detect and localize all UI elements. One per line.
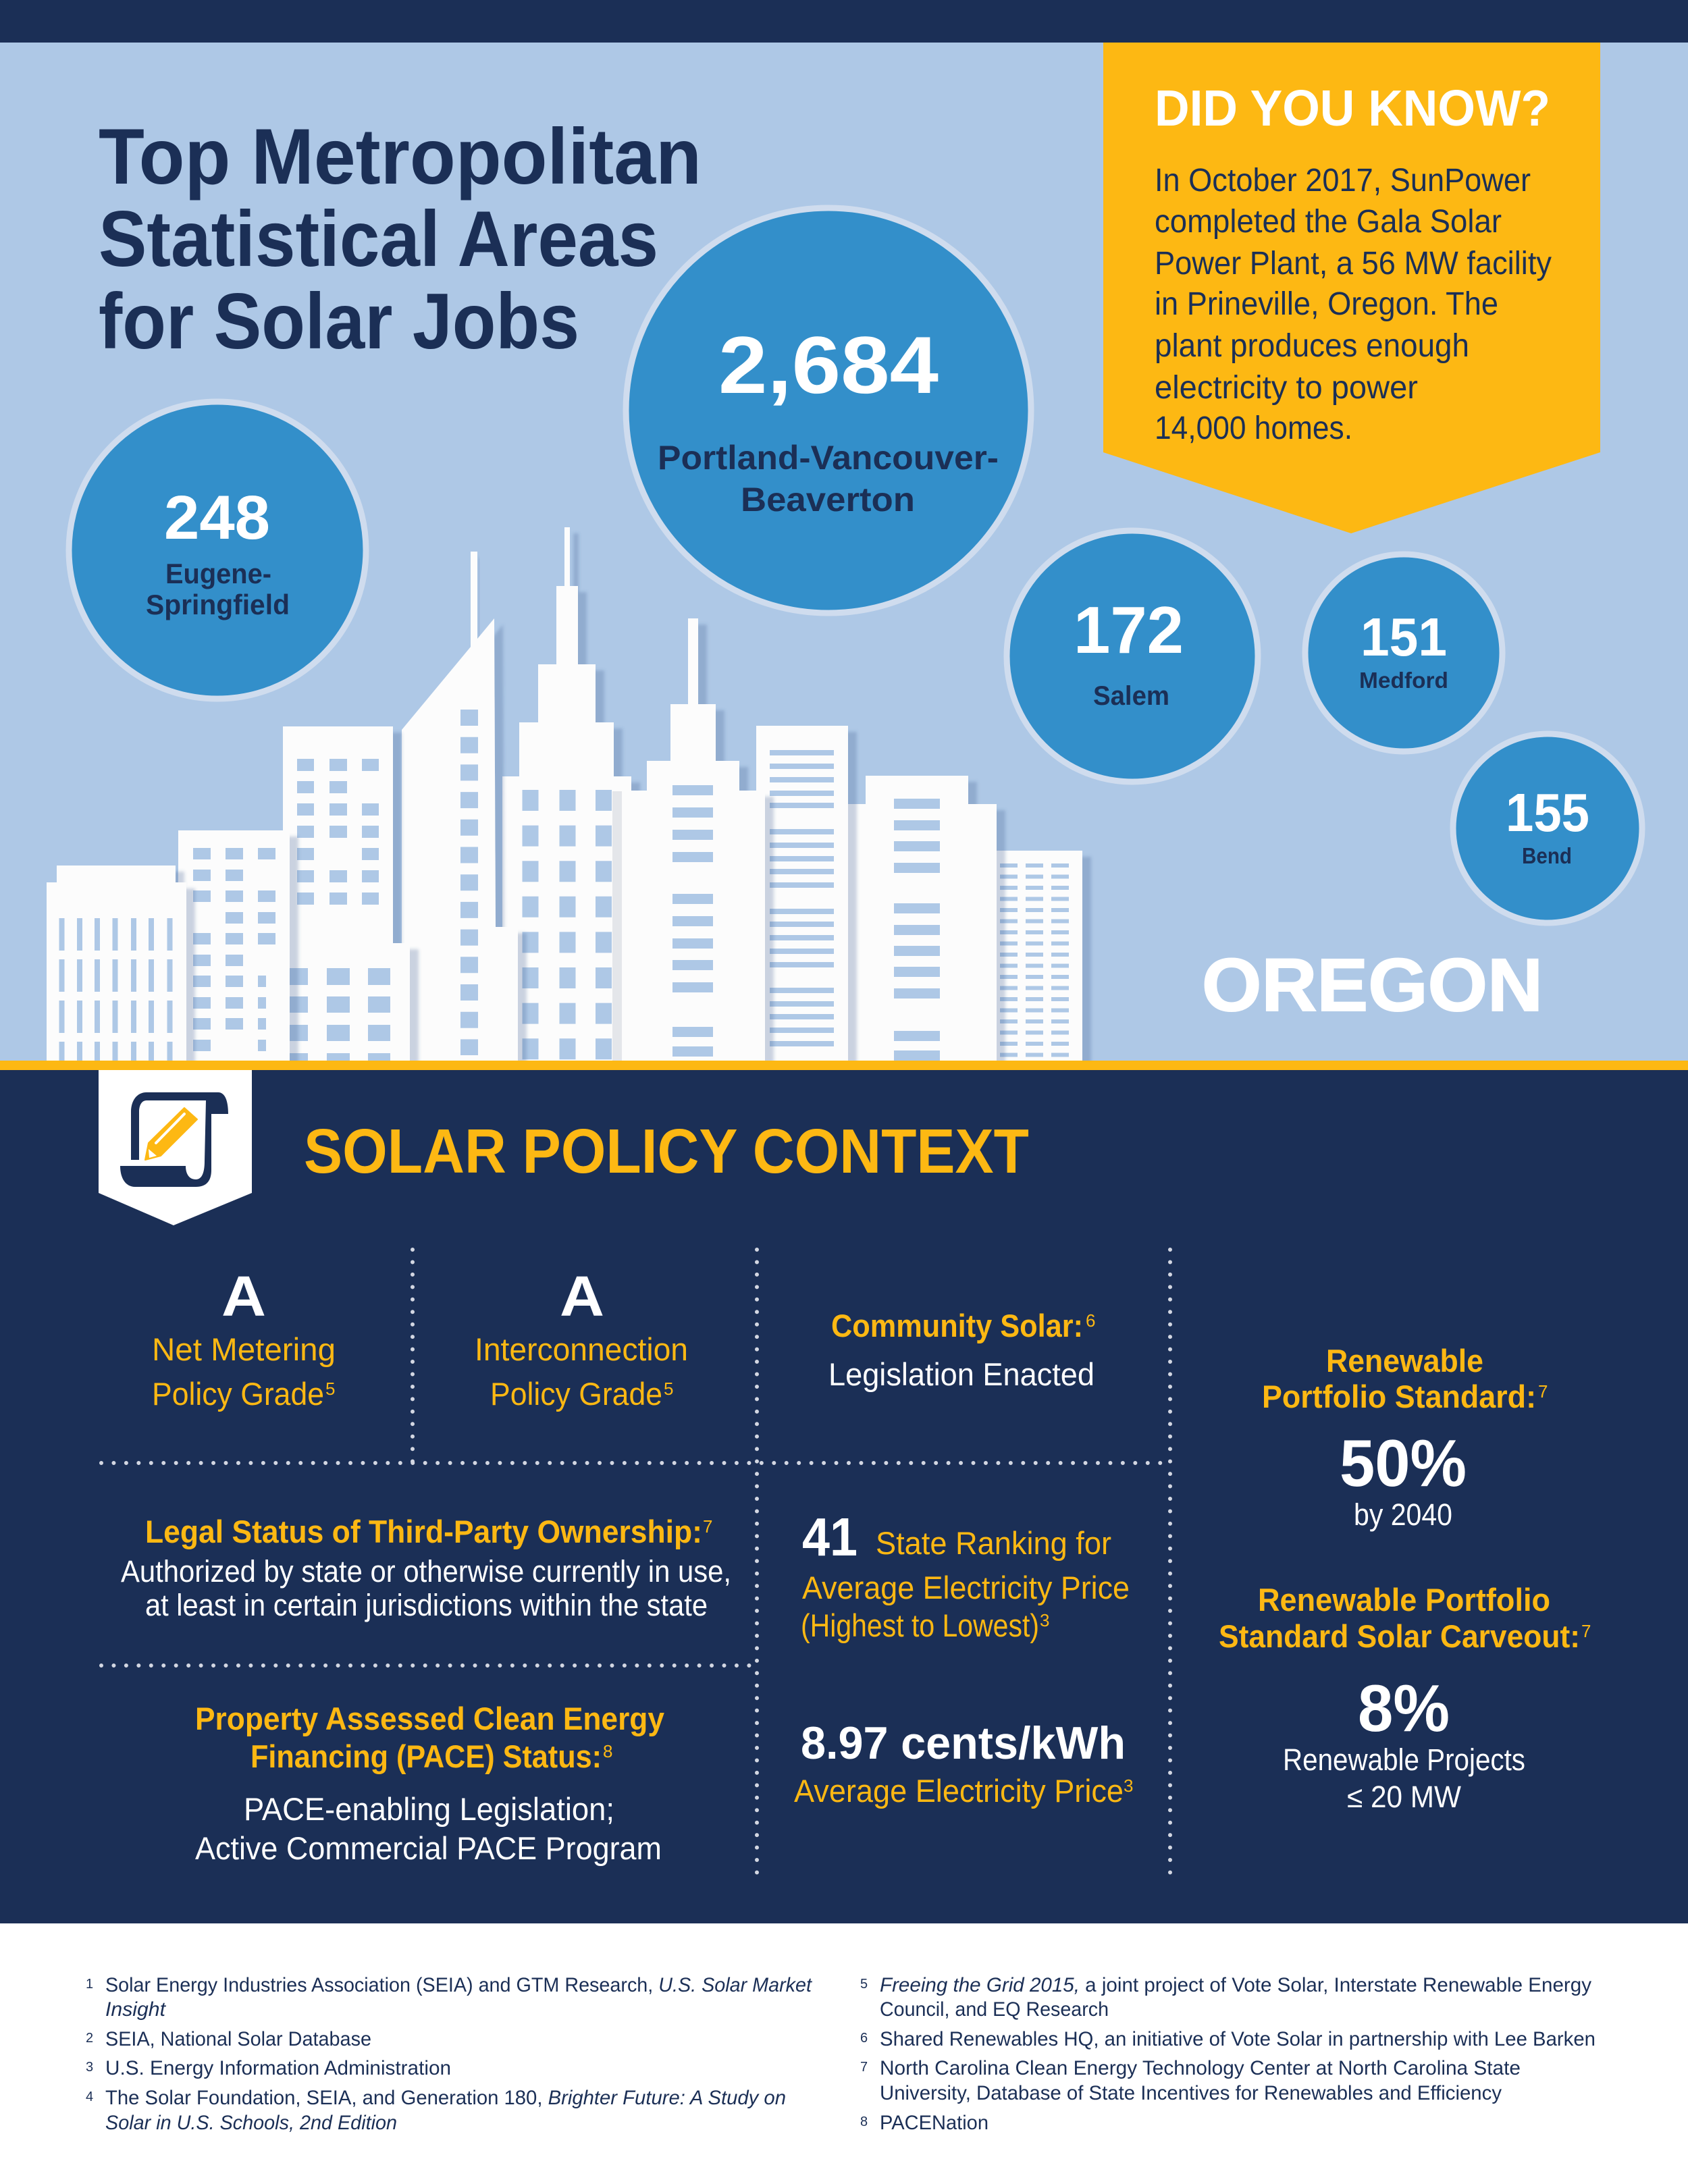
footnotes: left column: 3 — [86, 2060, 93, 2075]
building: central stepped spire tower — [502, 527, 631, 1061]
stat: state ranking: State Ranking for — [876, 1525, 1111, 1561]
stat: interconnection grade: 5 — [664, 1379, 673, 1399]
stat: community solar: Legislation Enacted — [828, 1356, 1094, 1392]
callout body text: Power Plant, a 56 MW facility — [1155, 246, 1552, 282]
bubble: Portland-Vancouver-Beaverton: Portland-Vancouver- — [658, 439, 999, 477]
building: far left block — [47, 865, 186, 1061]
stat: state ranking — [801, 1507, 1130, 1643]
callout: did you know — [1103, 43, 1600, 533]
bubble: Salem: 172 — [1074, 593, 1184, 667]
footnotes: left column: SEIA, National Solar Database — [105, 2028, 371, 2050]
stat: renewable portfolio standard: Portfolio Standard: — [1262, 1379, 1536, 1414]
stat: PACE status: Financing (PACE) Status: — [250, 1738, 602, 1774]
bubble: Medford: Medford — [1359, 668, 1448, 693]
callout body text: In October 2017, SunPower — [1155, 163, 1531, 198]
bubble: Bend: Bend — [1522, 843, 1572, 868]
bubble: Eugene-Springfield: Springfield — [146, 589, 290, 620]
stat: renewable portfolio standard — [1262, 1343, 1548, 1532]
callout body text: 14,000 homes. — [1155, 410, 1352, 446]
stat: interconnection grade: A — [560, 1264, 604, 1328]
stat: interconnection grade — [475, 1264, 688, 1412]
footnotes: right column: 6 — [860, 2031, 868, 2046]
footnotes: left column: Insight — [105, 1998, 167, 2021]
title: for Solar Jobs — [99, 277, 579, 365]
stat: state ranking: Average Electricity Price — [802, 1570, 1130, 1605]
stat: average electricity price: 8.97 cents/kWh — [801, 1717, 1126, 1769]
footnotes: left column: Solar Energy Industries Association (SEIA) and GTM Research, U.S. Solar Market — [105, 1974, 813, 1996]
footnotes: right column: Shared Renewables HQ, an initiative of Vote Solar in partnership with Lee Barken — [880, 2028, 1595, 2050]
footnotes: right column: Council, and EQ Research — [880, 1998, 1109, 2021]
bubble: Eugene-Springfield: 248 — [164, 483, 270, 552]
stat: average electricity price — [794, 1717, 1133, 1809]
building: angled roof tower — [402, 552, 518, 1061]
footnotes: right column: 8 — [860, 2114, 868, 2129]
building: far right low block — [997, 851, 1082, 1061]
stat: state ranking: 3 — [1040, 1610, 1049, 1630]
building: low front block — [287, 943, 410, 1061]
footnotes: left column: 2 — [86, 2031, 93, 2046]
stat: net metering grade: A — [221, 1264, 266, 1328]
footnotes: right column: 7 — [860, 2060, 868, 2075]
stat: community solar — [828, 1308, 1095, 1392]
stat: average electricity price: 3 — [1124, 1776, 1133, 1796]
background: sky panel — [0, 0, 1688, 1061]
stat: interconnection grade: Interconnection — [475, 1331, 688, 1367]
stat: PACE status: 8 — [603, 1741, 612, 1761]
footnotes: right column — [860, 1974, 1595, 2134]
footnotes: left column: 4 — [86, 2089, 93, 2104]
footnotes: left column: U.S. Energy Information Administration — [105, 2057, 451, 2079]
stat: community solar: 6 — [1086, 1310, 1095, 1331]
stat: third-party ownership: Legal Status of Third-Party Ownership: — [145, 1514, 702, 1549]
stat: PACE status — [195, 1701, 664, 1866]
stat: renewable portfolio standard: 7 — [1538, 1381, 1548, 1402]
stat: third-party ownership: Authorized by state or otherwise currently in use, — [121, 1554, 731, 1589]
bubble: Salem — [1007, 531, 1258, 782]
bubble: Bend — [1453, 734, 1642, 923]
state label: Oregon: OREGON — [1202, 944, 1543, 1027]
icon: scroll and pencil badge — [99, 1070, 252, 1225]
panel: solar policy context — [0, 1070, 1688, 1923]
stat: solar carveout: Renewable Portfolio — [1258, 1582, 1550, 1618]
bubble: Eugene-Springfield: Eugene- — [165, 558, 271, 589]
stat: state ranking: 41 — [802, 1507, 858, 1567]
footnotes: right column: Freeing the Grid 2015, a joint project of Vote Solar, Interstate Renewable Energy — [880, 1974, 1591, 1996]
callout body text: electricity to power — [1155, 370, 1418, 406]
stat: solar carveout: ≤ 20 MW — [1347, 1780, 1461, 1814]
stat: net metering grade: 5 — [325, 1379, 335, 1399]
dotted grid dividers — [101, 1250, 1171, 1873]
stat: community solar: Community Solar: — [831, 1308, 1083, 1343]
stat: net metering grade: Policy Grade — [152, 1376, 324, 1412]
title: Top Metropolitan — [99, 112, 702, 201]
stat: solar carveout: 7 — [1581, 1621, 1591, 1641]
callout body text: completed the Gala Solar — [1155, 204, 1502, 240]
bubble: Portland-Vancouver-Beaverton: Beaverton — [741, 481, 915, 518]
stat: net metering grade: Net Metering — [152, 1331, 336, 1367]
bubble: Salem: Salem — [1093, 681, 1169, 711]
callout body text: in Prineville, Oregon. The — [1155, 286, 1498, 322]
callout body text — [1155, 163, 1552, 446]
stat: PACE status: Active Commercial PACE Program — [195, 1830, 662, 1866]
stat: state ranking: (Highest to Lowest) — [801, 1607, 1039, 1643]
stat: third-party ownership — [121, 1514, 731, 1622]
callout body text: plant produces enough — [1155, 328, 1469, 364]
title: Statistical Areas — [99, 194, 658, 283]
city skyline illustration — [47, 527, 1082, 1061]
stat: third-party ownership: at least in certain jurisdictions within the state — [145, 1588, 708, 1622]
gold divider bar — [0, 1061, 1688, 1070]
building: striped tower — [756, 726, 848, 1061]
footnotes: left column: 1 — [86, 1977, 93, 1992]
title — [99, 112, 702, 365]
stat: third-party ownership: 7 — [703, 1516, 712, 1537]
bubble: Eugene-Springfield — [69, 402, 366, 699]
footnotes: left column: The Solar Foundation, SEIA, and Generation 180, Brighter Future: A Study on — [105, 2087, 786, 2109]
building: mid-left block — [178, 830, 290, 1061]
stat: interconnection grade: Policy Grade — [490, 1376, 662, 1412]
bubble: Medford: 151 — [1361, 607, 1447, 667]
top navy band — [0, 0, 1688, 43]
building: stepped antenna tower — [622, 618, 765, 1061]
stat: PACE status: PACE-enabling Legislation; — [244, 1791, 614, 1827]
stat: net metering grade — [152, 1264, 336, 1412]
building: tall square window block — [283, 726, 393, 1061]
stat: PACE status: Property Assessed Clean Energy — [195, 1701, 664, 1736]
bubble: Portland-Vancouver-Beaverton — [626, 208, 1031, 613]
stat: average electricity price: Average Electricity Price — [794, 1773, 1124, 1809]
stat: renewable portfolio standard: 50% — [1340, 1426, 1467, 1500]
bubble: Portland-Vancouver-Beaverton: 2,684 — [718, 320, 939, 410]
bubble: Bend: 155 — [1506, 782, 1589, 843]
footnotes: right column: PACENation — [880, 2112, 988, 2134]
section heading: SOLAR POLICY CONTEXT — [304, 1116, 1029, 1186]
stat: solar carveout: Renewable Projects — [1283, 1742, 1525, 1777]
stat: solar carveout: 8% — [1358, 1671, 1450, 1745]
stat: renewable portfolio standard: by 2040 — [1354, 1497, 1452, 1532]
footnotes: right column: University, Database of State Incentives for Renewables and Efficiency — [880, 2082, 1502, 2104]
footnotes: right column: 5 — [860, 1977, 868, 1992]
building: wide tower — [847, 776, 997, 1061]
callout heading: DID YOU KNOW? — [1155, 80, 1550, 136]
stat: solar carveout: Standard Solar Carveout: — [1219, 1618, 1580, 1654]
stat: solar carveout — [1219, 1582, 1591, 1814]
bubble: Medford — [1305, 554, 1502, 751]
footnotes: left column: Solar in U.S. Schools, 2nd Edition — [105, 2112, 397, 2134]
footnotes: left column — [86, 1974, 813, 2134]
stat: renewable portfolio standard: Renewable — [1326, 1343, 1483, 1379]
footnotes: right column: North Carolina Clean Energy Technology Center at North Carolina State — [880, 2057, 1521, 2079]
